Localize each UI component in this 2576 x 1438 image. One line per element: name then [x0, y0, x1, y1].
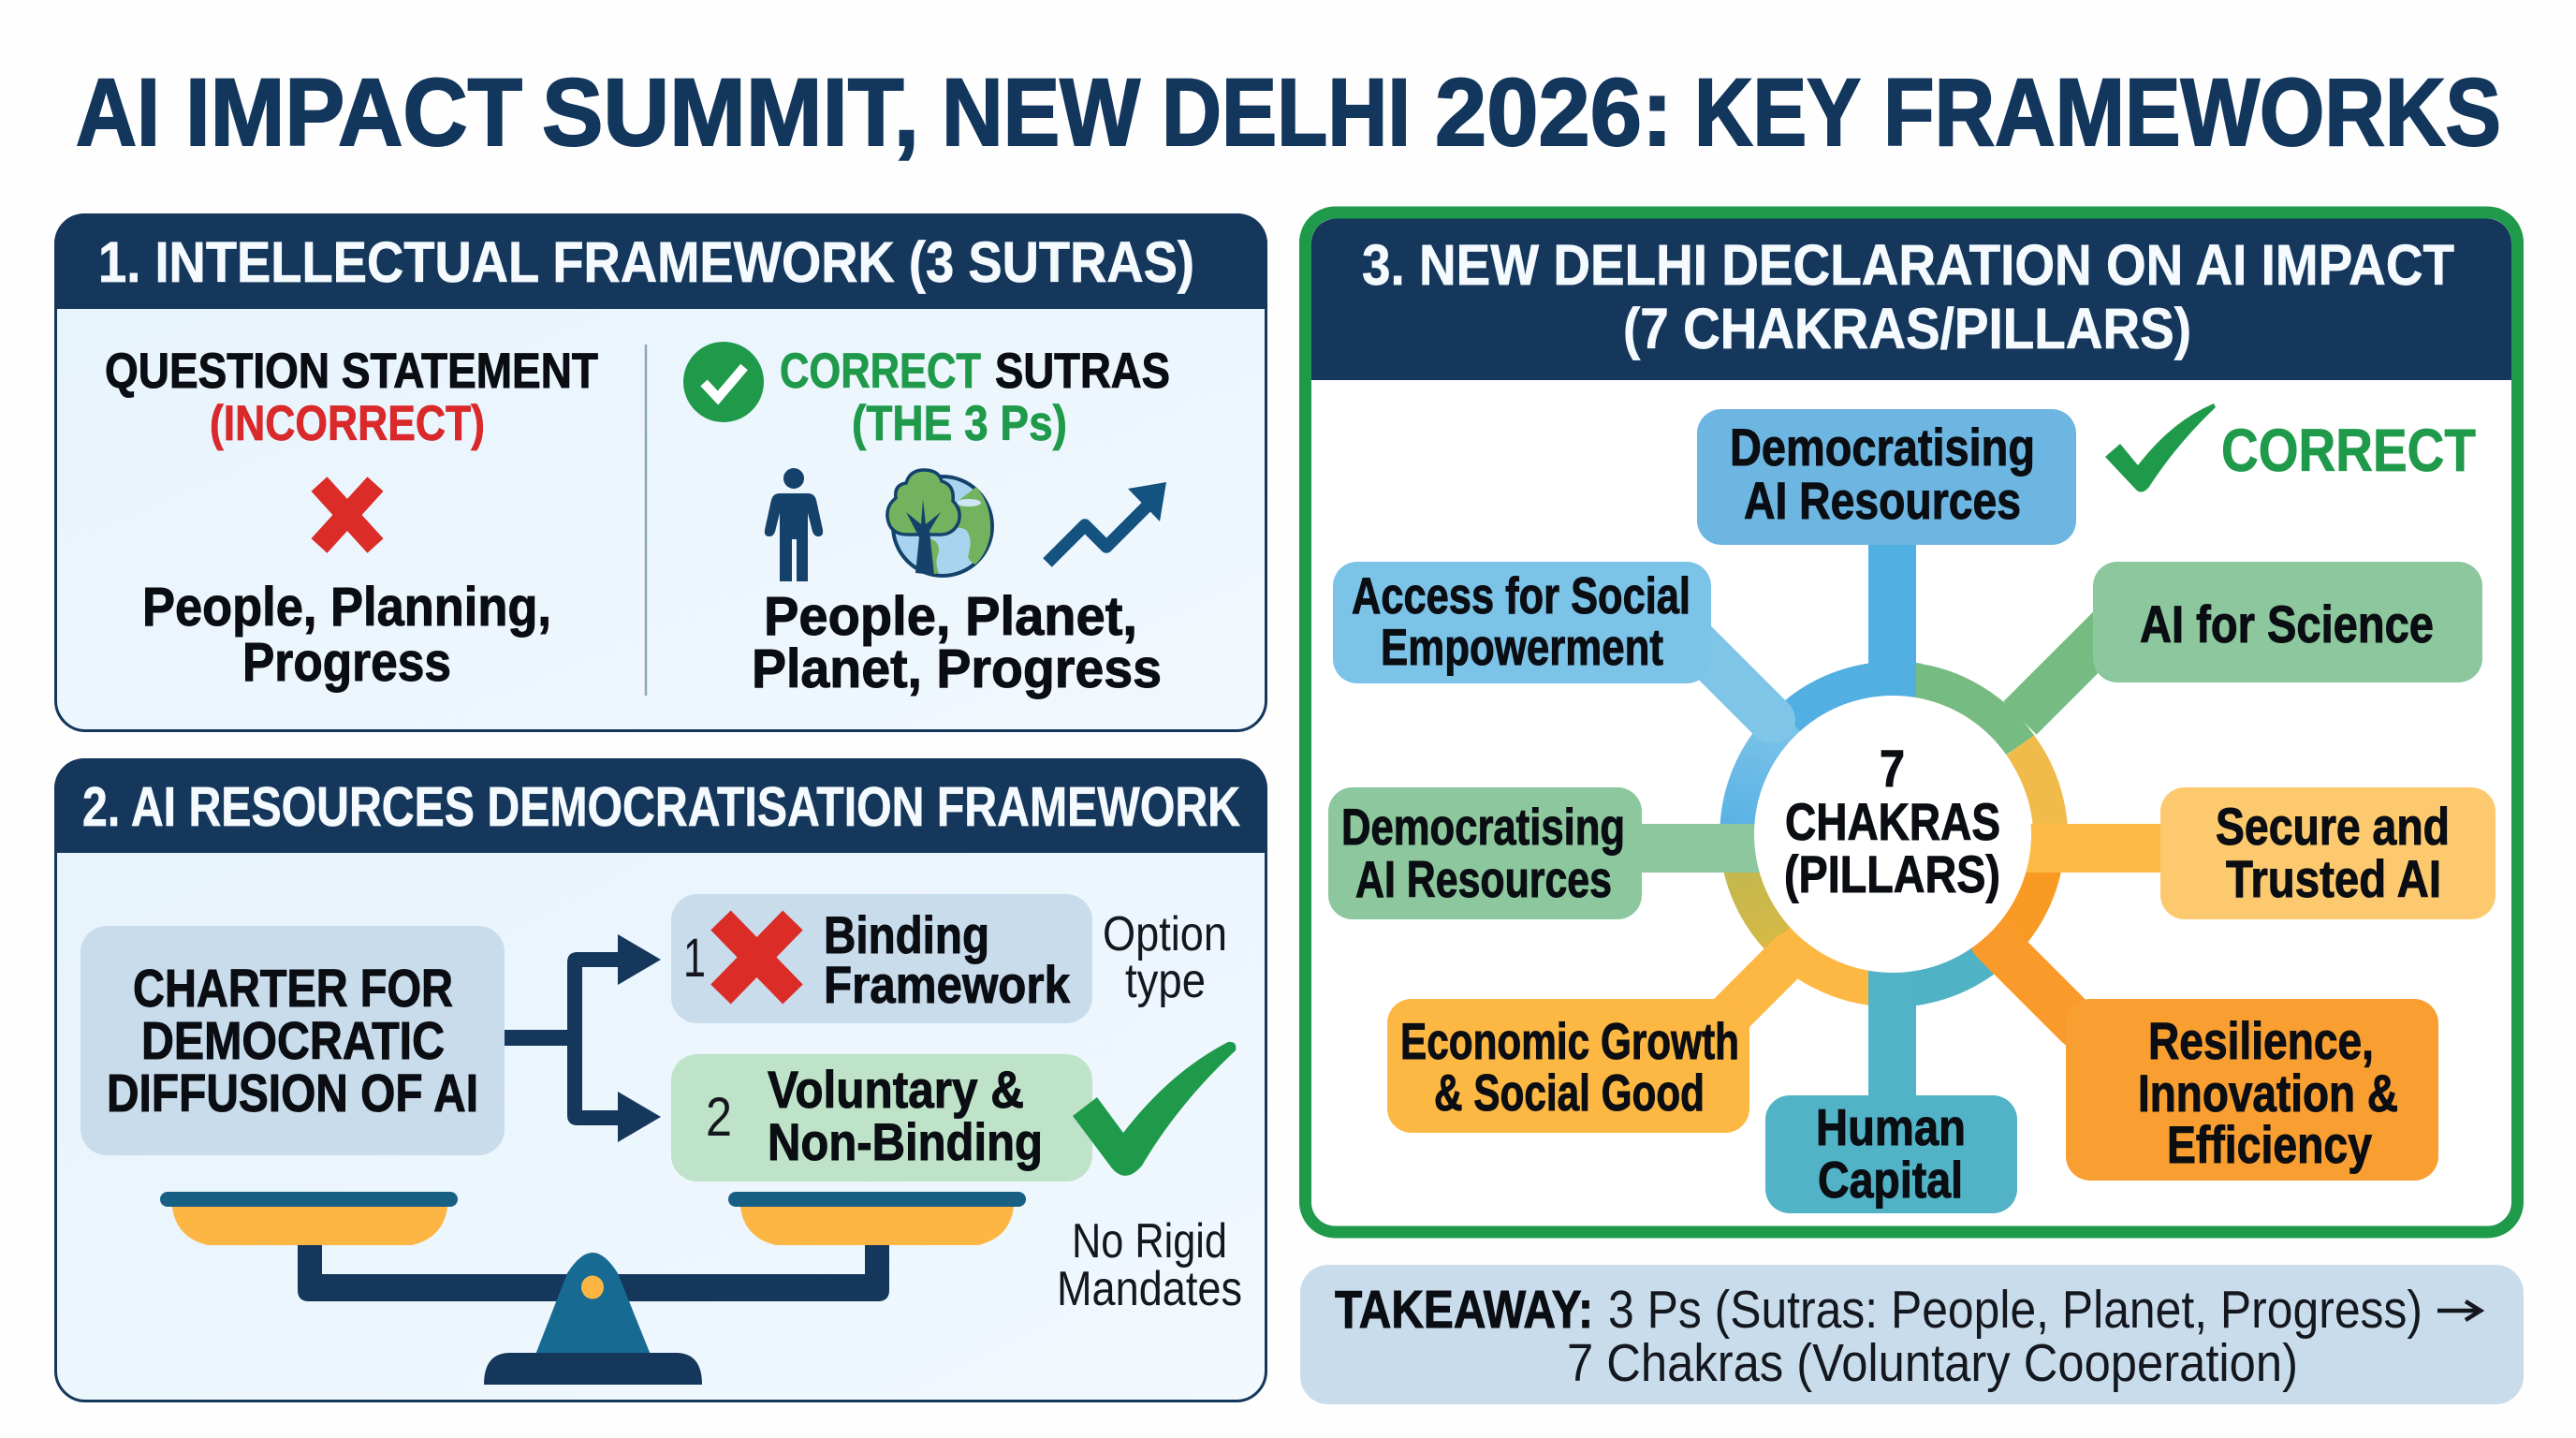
question statement heading [105, 344, 598, 451]
pillar: resilience, innovation and efficiency: Resilience, [2148, 1011, 2374, 1070]
pillar: AI for science: AI for Science [2140, 594, 2434, 653]
option 1: binding framework: Binding [824, 905, 989, 964]
charter box: CHARTER FOR [133, 959, 453, 1019]
pillar: resilience, innovation and efficiency: Efficiency [2167, 1115, 2372, 1174]
pillar: economic growth and social good: Economic Growth [1400, 1012, 1739, 1070]
option 1: binding framework: 1 [683, 928, 706, 989]
correct sutras heading [780, 344, 1170, 451]
icon: tree and planet [887, 470, 992, 576]
pillar: democratising AI resources (left) [1328, 787, 1642, 919]
pillar: democratising AI resources (top): AI Resources [1744, 471, 2021, 530]
icon: red cross [721, 920, 793, 994]
option 1: binding framework: Framework [824, 955, 1071, 1014]
correct sutras heading: SUTRAS [995, 344, 1170, 399]
panel 2 header bar [54, 758, 1267, 853]
incorrect sutras text [142, 577, 551, 693]
panel: 3. New Delhi declaration [1305, 213, 2518, 1232]
pillar: access for social empowerment: Access for Social [1352, 566, 1690, 624]
correct sutras heading: (THE 3 Ps) [852, 396, 1067, 451]
charter box: DIFFUSION OF AI [107, 1064, 478, 1123]
correct sutras text: Planet, Progress [752, 638, 1162, 699]
option 1: binding framework [671, 894, 1092, 1023]
panel 3 heading: (7 CHAKRAS/PILLARS) [1623, 297, 2191, 360]
title: DELHI [1162, 59, 1411, 166]
panel 3 heading [1362, 233, 2454, 360]
pillar: AI for science [2093, 562, 2482, 682]
option 2: voluntary and non-binding [671, 1054, 1092, 1181]
option 2: voluntary and non-binding: 2 [706, 1087, 732, 1148]
correct sutras text [752, 586, 1162, 699]
pillar: economic growth and social good [1387, 999, 1749, 1133]
pillar: economic growth and social good: & Social Good [1434, 1064, 1705, 1122]
ring segments [1737, 679, 2051, 990]
pillar: democratising AI resources (left): Democratising [1341, 798, 1625, 856]
takeaway bar: 7 Chakras (Voluntary Cooperation) [1567, 1333, 2298, 1393]
title [76, 59, 2501, 166]
no rigid mandates note: Mandates [1057, 1262, 1242, 1316]
center circle: 7 chakras: 7 [1880, 739, 1905, 798]
center circle: 7 chakras [1754, 696, 2031, 973]
pillar: democratising AI resources (left): AI Resources [1355, 850, 1612, 908]
pillar: secure and trusted AI [2160, 787, 2496, 919]
title: FRAMEWORKS [1883, 59, 2501, 166]
pillar: secure and trusted AI: Secure and [2216, 797, 2450, 856]
no rigid mandates note: No Rigid [1072, 1214, 1227, 1269]
panel 3 heading: 3. NEW DELHI DECLARATION ON AI IMPACT [1362, 233, 2454, 297]
icon: balance scale [160, 1192, 1026, 1385]
charter box: DEMOCRATIC [141, 1011, 445, 1071]
correct marker: CORRECT [2221, 417, 2476, 484]
pillar: access for social empowerment [1333, 562, 1711, 683]
option type note: Option [1103, 907, 1227, 961]
pillar: access for social empowerment: Empowerment [1381, 618, 1663, 676]
pillar: democratising AI resources (top) [1697, 409, 2076, 545]
icon: rising arrow [1047, 482, 1166, 563]
takeaway bar: 3 Ps (Sutras: People, Planet, Progress) [1608, 1280, 2422, 1340]
pillar: human capital [1765, 1095, 2017, 1213]
correct sutras text: People, Planet, [764, 586, 1137, 647]
panel: 2. AI resources democratisation framework [54, 758, 1267, 1401]
option 2: voluntary and non-binding: Non-Binding [768, 1112, 1043, 1171]
center circle: 7 chakras: CHAKRAS [1785, 792, 2000, 851]
chakra wheel hub [1638, 538, 2167, 1100]
arrow [2437, 1301, 2481, 1320]
option type note [1103, 907, 1227, 1008]
incorrect sutras text: Progress [242, 632, 451, 693]
panel 1 header bar [54, 213, 1267, 309]
spokes [1638, 538, 2167, 1100]
title: SUMMIT, [542, 59, 919, 166]
panel: 1. intellectual framework [54, 213, 1267, 730]
icon: red cross [319, 484, 375, 546]
pillar: human capital: Human [1816, 1098, 1966, 1156]
pillar: resilience, innovation and efficiency: Innovation & [2138, 1064, 2398, 1123]
pillar: democratising AI resources (top): Democratising [1730, 418, 2035, 477]
takeaway bar [1300, 1265, 2524, 1404]
incorrect sutras text: People, Planning, [142, 577, 551, 638]
title: NEW [942, 59, 1141, 166]
title: AI [76, 59, 160, 166]
no rigid mandates note [1057, 1214, 1242, 1316]
option 2: voluntary and non-binding: Voluntary & [768, 1060, 1024, 1119]
icon: green check [2105, 404, 2216, 492]
title: KEY [1694, 59, 1861, 166]
title: IMPACT [185, 59, 522, 166]
option type note: type [1125, 954, 1206, 1008]
correct sutras heading: CORRECT [780, 344, 981, 399]
pillar: secure and trusted AI: Trusted AI [2226, 849, 2441, 908]
panel 1 heading: 1. INTELLECTUAL FRAMEWORK (3 SUTRAS) [98, 230, 1194, 294]
title: 2026: [1435, 59, 1673, 166]
pillar: resilience, innovation and efficiency [2066, 999, 2438, 1181]
question statement heading: (INCORRECT) [210, 396, 485, 451]
correct marker [2105, 404, 2476, 492]
icon: green check badge [683, 342, 764, 422]
icon: large green check [1073, 1042, 1236, 1176]
charter box [80, 926, 505, 1155]
question statement heading: QUESTION STATEMENT [105, 344, 598, 399]
arrows: branching connector [505, 934, 661, 1142]
center circle: 7 chakras: (PILLARS) [1784, 844, 2000, 903]
takeaway bar: TAKEAWAY: [1335, 1280, 1593, 1340]
panel 2 heading: 2. AI RESOURCES DEMOCRATISATION FRAMEWORK [82, 776, 1240, 838]
panel 3 header bar [1311, 219, 2511, 380]
pillar: human capital: Capital [1818, 1151, 1963, 1209]
icon: person [765, 468, 823, 581]
